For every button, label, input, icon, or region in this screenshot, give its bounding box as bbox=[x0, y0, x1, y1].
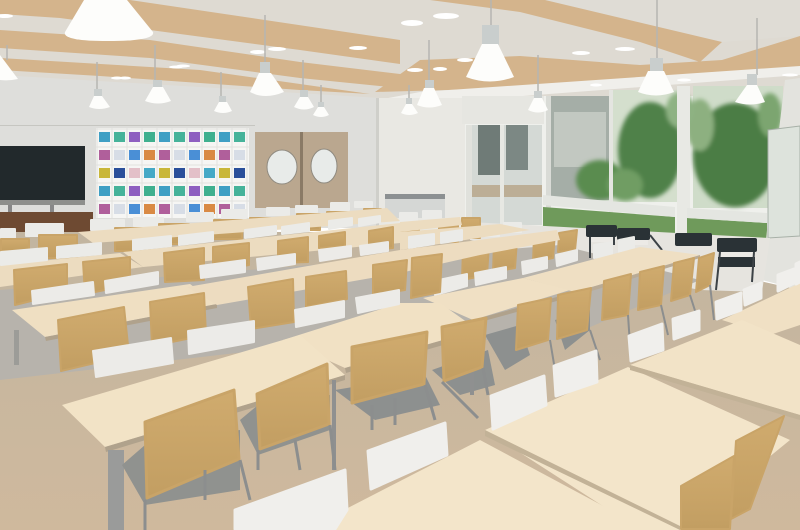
far row of wooden chairs bbox=[1, 209, 480, 258]
double doors bbox=[255, 132, 348, 208]
recycling bins bbox=[385, 194, 445, 218]
second row tables bbox=[12, 230, 560, 365]
far tables bbox=[0, 208, 530, 287]
windows with courtyard view bbox=[462, 86, 785, 241]
front-right wooden chairs bbox=[681, 416, 784, 529]
front-left wooden chairs bbox=[122, 318, 488, 530]
ceiling downlights bbox=[0, 13, 798, 86]
ceiling bbox=[0, 0, 800, 110]
front-right row of tables bbox=[305, 283, 800, 530]
far rows of white chairs bbox=[1, 202, 521, 239]
right side wooden chairs of the second row bbox=[373, 254, 442, 298]
front-right white chairs bbox=[235, 262, 800, 529]
middle row tables bbox=[423, 247, 700, 324]
front-left row of tables bbox=[62, 303, 478, 530]
right wall with whiteboard bbox=[762, 78, 800, 290]
row of wooden chairs, middle bbox=[58, 253, 714, 420]
black chairs by the window bbox=[586, 225, 757, 290]
wooden ceiling beams bbox=[0, 0, 800, 94]
children's art board bbox=[96, 128, 249, 218]
back wall bbox=[0, 75, 468, 233]
television bbox=[0, 146, 93, 235]
pendant lamps bbox=[0, 0, 765, 117]
second far row of white chairs bbox=[1, 216, 634, 265]
white chairs, middle row bbox=[93, 290, 399, 377]
shaded floor and chair seats under far tables bbox=[0, 245, 700, 380]
floor bbox=[0, 232, 800, 530]
second row white chairs bbox=[32, 242, 577, 304]
second row of wooden chairs bbox=[14, 227, 577, 305]
bright floor by windows bbox=[470, 222, 770, 292]
ceiling soffit over windows bbox=[378, 66, 800, 100]
